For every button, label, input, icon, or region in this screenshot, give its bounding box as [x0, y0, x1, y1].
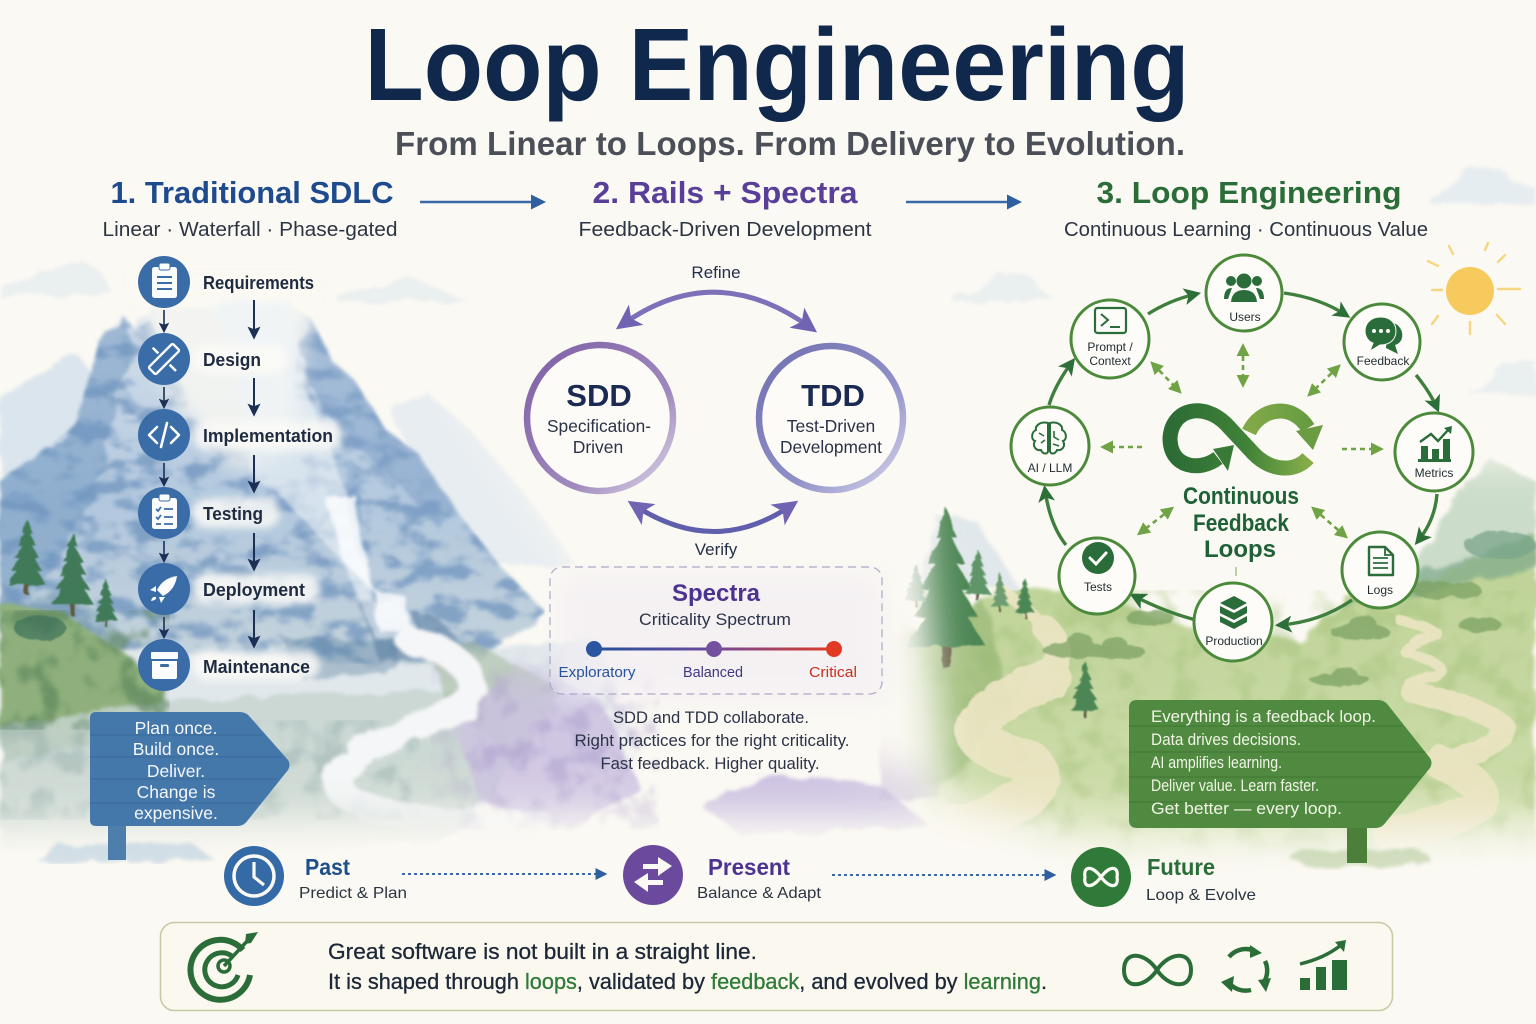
Spectra caption: SDD and TDD collaborate.: [613, 708, 809, 727]
icon: refresh cycle: [1221, 945, 1271, 992]
node: Feedback: Feedback: [1357, 354, 1410, 368]
background: winding river: [337, 640, 540, 826]
panel: SDLC waterfall steps: [138, 256, 342, 691]
blue mountain: [0, 306, 545, 664]
column heading: Rails + Spectra: 2. Rails + Spectra: [592, 175, 858, 210]
step: Testing: Testing: [203, 503, 263, 524]
column heading: Traditional SDLC: Linear · Waterfall · Phase-gated: [102, 218, 398, 241]
timeline: Past: Past: [305, 854, 350, 880]
takeaway text: Great software is not built in a straight line.: [328, 939, 757, 964]
Spectra criticality box: Spectra: [672, 580, 761, 607]
node: Production: Production: [1205, 634, 1263, 648]
TDD ring: Development: [780, 437, 882, 457]
step: Deployment: Deployment: [203, 579, 305, 600]
step: Requirements: Requirements: [203, 272, 314, 293]
node: Tests: [1059, 538, 1135, 614]
left trees: [8, 519, 118, 641]
step: Testing: [138, 487, 263, 539]
node: AI / LLM: AI / LLM: [1028, 461, 1072, 475]
Spectra caption: Right practices for the right criticality.: [574, 731, 850, 750]
center label: [1183, 483, 1299, 563]
panel: SDD and TDD collaboration: [527, 263, 903, 773]
TDD ring: Test-Driven: [787, 416, 875, 436]
arrow: Rails + Spectra to Loop Engineering: [906, 201, 1019, 203]
far hills: [915, 458, 1536, 620]
step: Maintenance: Maintenance: [203, 656, 310, 677]
footpaths: [960, 590, 1505, 835]
center label: Continuous: [1183, 483, 1299, 510]
title: Loop Engineering: [364, 7, 1190, 122]
Spectra criticality box: Criticality Spectrum: [639, 611, 791, 629]
signpost: Plan once: Plan once.: [135, 718, 217, 738]
background: pale wash behind Spectra: [560, 575, 885, 700]
background: watercolor clouds: [0, 166, 1536, 395]
node: Users: Users: [1229, 310, 1261, 324]
node: Metrics: Metrics: [1415, 466, 1453, 480]
background: left landscape: [0, 302, 628, 842]
node: Logs: [1342, 532, 1418, 608]
node: Prompt / Context: Context: [1089, 354, 1131, 368]
timeline: Future: Loop & Evolve: [1146, 887, 1256, 904]
SDD ring: Specification-: [547, 416, 651, 436]
Refine arrow: [622, 263, 811, 328]
arrow: SDLC to Rails + Spectra: [420, 201, 543, 203]
signpost: Plan once: Build once.: [133, 739, 219, 759]
icon: growth chart: [1300, 940, 1347, 990]
timeline: Past: [224, 846, 407, 906]
timeline: Present: [623, 845, 822, 905]
signpost: Plan once: [90, 712, 290, 860]
step: Design: Design: [203, 349, 261, 370]
background: purple wash: [433, 661, 938, 834]
dashed spokes: [1104, 347, 1380, 576]
timeline: Future: Future: [1147, 854, 1215, 880]
node: Logs: Logs: [1367, 583, 1393, 597]
SDD ring: Driven: [573, 437, 623, 457]
SDD ring: SDD: [566, 378, 632, 413]
Spectra criticality box: Critical: [809, 665, 857, 681]
column heading: Traditional SDLC: [102, 175, 398, 241]
timeline: Past: Predict & Plan: [299, 885, 407, 902]
Spectra caption: [574, 708, 850, 773]
step: Requirements: [138, 256, 314, 308]
signpost: Everything is a feedback loop: Deliver value. Learn faster.: [1151, 776, 1319, 795]
signpost: Plan once: Deliver.: [147, 761, 205, 781]
column heading: Rails + Spectra: [578, 175, 872, 241]
node: AI / LLM: [1011, 407, 1089, 485]
signpost: Plan once: expensive.: [134, 803, 218, 823]
takeaway text: It is shaped through loops, validated by feedback, and evolved by learning.: [328, 969, 1047, 994]
timeline: Present: Balance & Adapt: [697, 885, 822, 902]
signpost: Everything is a feedback loop: [1129, 700, 1432, 863]
TDD ring: TDD: [801, 378, 865, 413]
distant pale ranges: [0, 352, 640, 760]
Refine arrow: Refine: [691, 263, 741, 282]
step: Design: [138, 333, 261, 385]
panel: continuous feedback loop: [1011, 255, 1473, 661]
Spectra criticality box: Balanced: [683, 665, 743, 681]
Spectra caption: Fast feedback. Higher quality.: [600, 754, 820, 773]
subtitle: From Linear to Loops. From Delivery to Evolution.: [395, 125, 1185, 162]
meadow: [0, 605, 560, 860]
node: Tests: Tests: [1084, 580, 1112, 594]
takeaway banner: [160, 922, 1392, 1010]
step: Implementation: Implementation: [203, 425, 333, 446]
background: right landscape: [880, 458, 1536, 880]
timeline: Present: Present: [708, 854, 790, 880]
step: Maintenance: [138, 639, 310, 691]
center label: Loops: [1204, 536, 1276, 563]
column heading: Loop Engineering: [1064, 175, 1428, 241]
icon: target: [190, 932, 258, 1000]
step: Deployment: [138, 563, 305, 615]
infinity loop icon: [1170, 411, 1323, 471]
TDD ring: [759, 346, 903, 490]
background: wash around green sign post: [1290, 848, 1430, 868]
Spectra criticality box: Exploratory: [558, 665, 636, 681]
meadow: [916, 533, 1536, 856]
mist over summit: [135, 304, 318, 478]
column heading: Rails + Spectra: Feedback-Driven Development: [578, 218, 872, 241]
signpost: Everything is a feedback loop: Get better — every loop.: [1151, 799, 1342, 818]
icon: infinity: [1124, 956, 1191, 984]
node: Prompt / Context: Prompt /: [1087, 340, 1133, 354]
column heading: Loop Engineering: Continuous Learning · Continuous Value: [1064, 218, 1428, 241]
waterfall: [215, 300, 418, 640]
node: Feedback: [1344, 304, 1420, 380]
sun: [1428, 243, 1520, 334]
node: Metrics: [1395, 413, 1473, 491]
center label: Feedback: [1193, 510, 1290, 537]
loop arrows: [1045, 293, 1437, 625]
step: Implementation: [138, 409, 333, 461]
signpost: Everything is a feedback loop: Everything is a feedback loop.: [1151, 707, 1376, 726]
column heading: Loop Engineering: 3. Loop Engineering: [1096, 175, 1402, 210]
signpost: Everything is a feedback loop: Data drives decisions.: [1151, 730, 1301, 749]
Spectra criticality box: [550, 567, 882, 694]
arrow: Past to Present: [402, 873, 605, 875]
takeaway text: [328, 939, 1047, 994]
signpost: Everything is a feedback loop: AI amplifies learning.: [1151, 753, 1282, 772]
Verify arrow: Verify: [695, 540, 738, 559]
right trees: [905, 508, 1100, 718]
SDD ring: [527, 345, 673, 491]
timeline: Future: [1071, 847, 1256, 907]
column heading: Traditional SDLC: 1. Traditional SDLC: [110, 175, 394, 210]
arrow: Present to Future: [832, 874, 1054, 876]
mountain rock texture: [0, 315, 545, 664]
node: Users: [1206, 255, 1282, 331]
Verify arrow: [634, 505, 792, 559]
node: Prompt / Context: [1071, 300, 1149, 378]
shrubs: [1042, 531, 1536, 686]
background: wash around sign post: [40, 842, 215, 862]
signpost: Plan once: Change is: [137, 782, 216, 802]
node: Production: [1194, 583, 1272, 661]
